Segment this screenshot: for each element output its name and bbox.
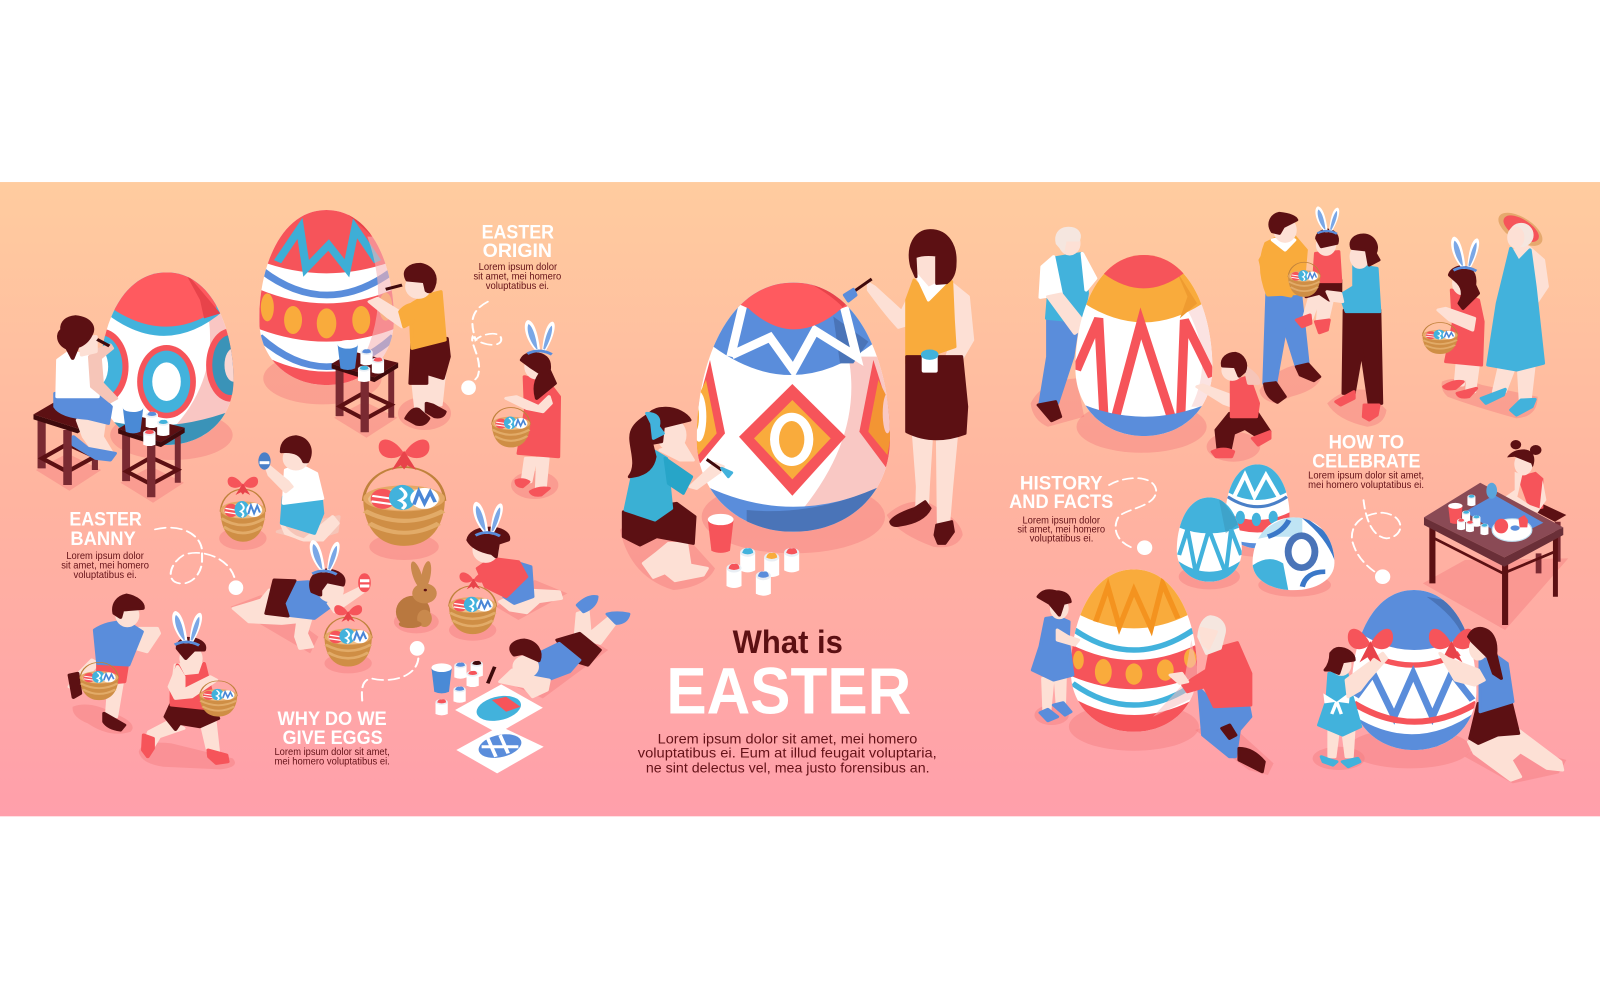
basket: large with bow xyxy=(363,439,445,560)
person: child on father's arm xyxy=(1288,206,1341,333)
person: crawling girl with bunny ears xyxy=(231,540,369,653)
heading: how to celebrate xyxy=(1312,432,1420,473)
title line: what is: What is xyxy=(733,623,843,660)
body text: why do we give eggs: Lorem ipsum dolor sit amet, xyxy=(274,747,390,758)
body text: easter banny xyxy=(61,551,149,581)
main egg: woman and girl painting xyxy=(696,282,890,532)
text block: how to celebrate xyxy=(1308,432,1424,491)
basket: kneeling girl xyxy=(449,572,496,641)
heading: why do we give eggs: WHY DO WE xyxy=(278,708,387,730)
egg: blue rings xyxy=(1251,515,1337,597)
dashed connector: history and facts xyxy=(1109,478,1156,555)
body text: why do we give eggs: mei homero voluptatibus ei. xyxy=(274,756,390,767)
body text: history and facts: sit amet, mei homero xyxy=(1017,524,1105,535)
egg: teal zigzag xyxy=(1177,495,1242,589)
paint jars on stool xyxy=(123,403,169,446)
person: girl and grandmother xyxy=(1422,206,1549,418)
person: toddler pushing egg xyxy=(1197,353,1270,462)
scene: left illustrations xyxy=(33,203,629,773)
egg: blue top with zigzag xyxy=(1348,587,1480,768)
person: kneeling girl hugging egg xyxy=(1440,628,1566,783)
stool: paint stool xyxy=(118,416,185,503)
paint jars on top stool xyxy=(338,340,384,382)
person: small girl in blue dress xyxy=(1033,591,1078,725)
heading: how to celebrate: CELEBRATE xyxy=(1312,451,1420,473)
stool: top paint stool xyxy=(332,351,398,438)
text block: why do we give eggs xyxy=(274,708,390,767)
heading: history and facts xyxy=(1009,472,1113,513)
egg shadow xyxy=(702,480,885,553)
heading: why do we give eggs: GIVE EGGS xyxy=(283,727,383,749)
egg: red zigzag with orange band xyxy=(1073,250,1218,453)
body text: easter origin: Lorem ipsum dolor xyxy=(479,262,558,273)
text block: history and facts xyxy=(1009,472,1113,544)
body text: easter origin xyxy=(473,262,561,292)
body text: easter banny: Lorem ipsum dolor xyxy=(66,551,145,562)
person: kneeling girl painting xyxy=(620,408,732,590)
egg: orange cap and red band xyxy=(1069,567,1203,751)
text block: easter banny xyxy=(61,509,149,581)
dashed connector: why do we give eggs xyxy=(362,641,424,703)
title line: easter: EASTER xyxy=(666,654,911,728)
person: girl in teal dress with bow xyxy=(1313,648,1386,770)
body text: history and facts: Lorem ipsum dolor xyxy=(1022,515,1101,526)
scene: right illustrations xyxy=(1031,206,1568,783)
heading: easter banny: EASTER xyxy=(69,509,142,531)
body text: easter origin: sit amet, mei homero xyxy=(473,271,561,282)
basket: small with bow xyxy=(219,477,267,550)
person: boy sitting with small egg xyxy=(258,437,339,540)
body text: why do we give eggs xyxy=(274,747,390,767)
paint jars on floor xyxy=(431,661,483,715)
person: painting woman xyxy=(844,231,973,547)
person: lying girl painting xyxy=(488,596,629,698)
person: running boy with basket xyxy=(69,595,159,734)
dashed connector: how to celebrate xyxy=(1352,500,1400,584)
heading: why do we give eggs xyxy=(278,708,387,749)
heading: easter banny: BANNY xyxy=(70,528,136,550)
icon: brown rabbit xyxy=(394,561,439,633)
egg: red and teal rings xyxy=(102,272,234,460)
text block: easter origin xyxy=(473,221,561,292)
body text: intro paragraph xyxy=(638,731,937,776)
body text: easter origin: voluptatibus ei. xyxy=(486,281,549,292)
heading: history and facts: AND FACTS xyxy=(1009,491,1113,513)
body text: easter banny: voluptatibus ei. xyxy=(73,570,137,581)
egg: teal and red striped xyxy=(1226,464,1290,556)
person: girl with bunny ears and basket xyxy=(492,320,559,499)
person: kneeling girl with bunny ears xyxy=(468,502,567,620)
paper sheet with painted egg xyxy=(455,684,543,733)
person: girl painting on stool xyxy=(55,317,116,460)
person and table: girl painting at table xyxy=(1423,440,1568,630)
heading: easter banny xyxy=(69,509,142,550)
paint cup and jars xyxy=(708,514,799,596)
scene: central illustration xyxy=(620,231,973,596)
egg: striped red with orange dots xyxy=(259,210,394,404)
person: grandfather behind egg xyxy=(1031,228,1096,427)
person: mother xyxy=(1327,235,1386,427)
body text: easter banny: sit amet, mei homero xyxy=(61,560,149,571)
title block: what is easter xyxy=(638,623,937,776)
body text: intro paragraph: Lorem ipsum dolor sit amet, mei homero xyxy=(658,731,917,747)
person: boy painting egg xyxy=(369,264,451,430)
heading: how to celebrate: HOW TO xyxy=(1329,432,1404,454)
paper sheet with striped egg xyxy=(456,726,544,773)
heading: easter origin xyxy=(482,221,554,262)
body text: history and facts: voluptatibus ei. xyxy=(1030,533,1093,544)
dashed connector: easter origin xyxy=(461,302,501,395)
background panel xyxy=(0,182,1600,816)
basket: crawling girl xyxy=(324,605,372,673)
heading: history and facts: HISTORY xyxy=(1020,472,1103,494)
bows on egg xyxy=(1348,629,1474,662)
person: father holding child xyxy=(1259,213,1321,403)
body text: history and facts xyxy=(1017,515,1105,544)
heading: easter origin: ORIGIN xyxy=(483,240,552,262)
stool: seated girl xyxy=(33,402,102,491)
person: grandfather kneeling xyxy=(1170,617,1274,775)
body text: how to celebrate xyxy=(1308,471,1424,491)
heading: easter origin: EASTER xyxy=(482,221,554,243)
body text: intro paragraph: ne sint delectus vel, mea justo forensibus an. xyxy=(646,760,930,776)
body text: intro paragraph: voluptatibus ei. Eum at illud feugait voluptaria, xyxy=(638,746,937,762)
dashed connector: easter banny xyxy=(155,528,243,595)
body text: how to celebrate: Lorem ipsum dolor sit amet, xyxy=(1308,471,1424,482)
person: running girl with bunny ears and basket xyxy=(139,611,237,769)
body text: how to celebrate: mei homero voluptatibus ei. xyxy=(1308,480,1424,491)
